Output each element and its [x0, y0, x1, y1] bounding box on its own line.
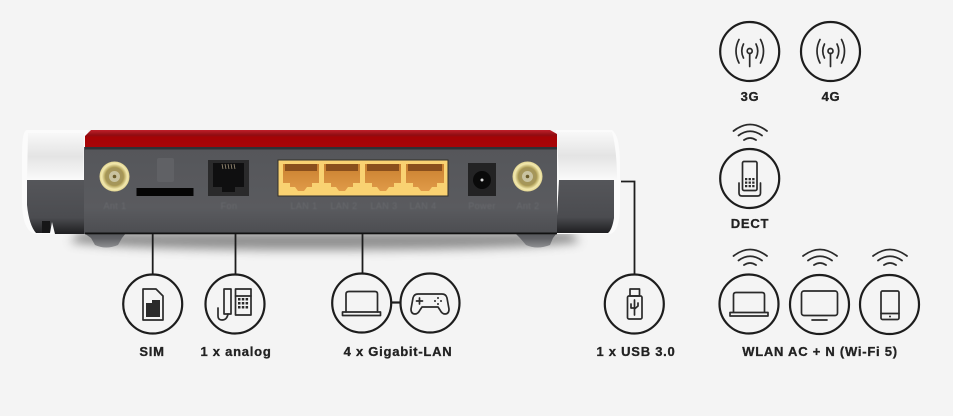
label: WLAN AC + N (Wi-Fi 5): WLAN AC + N (Wi-Fi 5)	[742, 344, 898, 359]
icon: 4G	[801, 22, 860, 81]
label: 4G: 4G	[822, 89, 840, 104]
port labels	[103, 201, 540, 211]
power port	[468, 163, 496, 196]
right end cap	[556, 130, 620, 234]
icon: WLAN tablet	[860, 250, 919, 334]
label: 4 x Gigabit-LAN: 4 x Gigabit-LAN	[344, 344, 452, 359]
port labels: Ant 2	[516, 201, 540, 211]
port labels: Power	[468, 201, 496, 211]
port labels: LAN 4	[409, 201, 437, 211]
red top strip	[85, 130, 557, 147]
icon: USB stick	[605, 274, 664, 334]
connector lines	[153, 182, 634, 302]
port labels: Ant 1	[103, 201, 127, 211]
label: 1 x analog: 1 x analog	[200, 344, 272, 359]
icon: SIM	[123, 274, 182, 334]
label: DECT: DECT	[731, 216, 769, 231]
icon: analog phone	[206, 274, 264, 334]
phone port	[208, 160, 249, 196]
port labels: LAN 3	[370, 201, 398, 211]
router back panel	[84, 147, 557, 234]
icon: LAN laptop	[332, 274, 391, 332]
icon: DECT phone	[720, 124, 779, 208]
port labels: LAN 2	[330, 201, 358, 211]
icon: WLAN monitor	[790, 250, 849, 334]
bottom edge	[85, 232, 557, 234]
port labels: Fon	[221, 201, 237, 211]
label: 1 x USB 3.0: 1 x USB 3.0	[596, 344, 676, 359]
left end cap	[22, 130, 88, 234]
icon: WLAN laptop	[720, 250, 778, 334]
icon: 3G	[720, 22, 779, 81]
port labels: LAN 1	[290, 201, 318, 211]
antenna port 1	[100, 162, 130, 192]
router feet	[84, 233, 557, 248]
LAN ports	[278, 160, 448, 196]
label: SIM: SIM	[139, 344, 165, 359]
router shadow	[70, 232, 580, 250]
icon: gamepad	[400, 274, 460, 332]
label: 3G: 3G	[741, 89, 759, 104]
router	[22, 130, 620, 250]
SIM slot	[136, 158, 194, 196]
antenna port 2	[512, 162, 542, 192]
